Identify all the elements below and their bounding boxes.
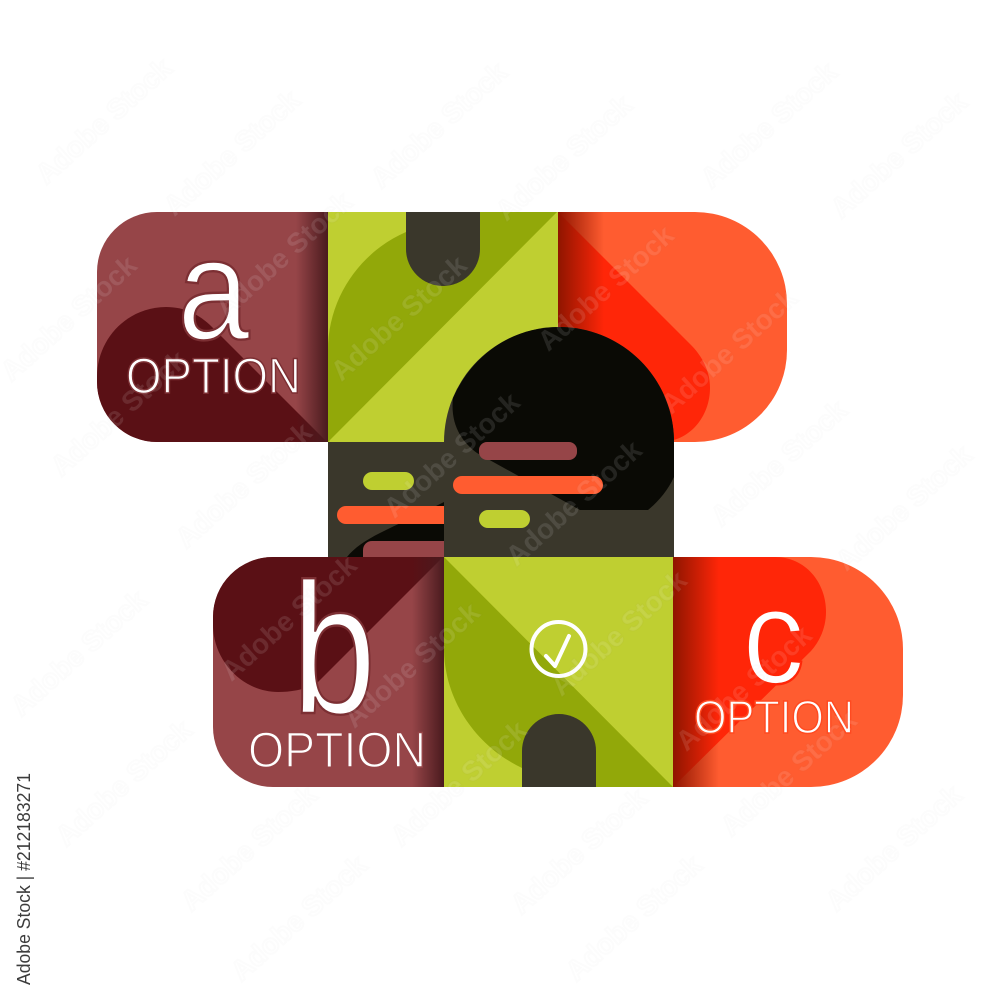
label: option c: OPTION [694,691,854,743]
watermark pattern: Adobe Stock [158,84,306,222]
watermark pattern: Adobe Stock [385,714,533,852]
panel: bottom green square [444,557,673,787]
bar: green [363,472,414,490]
vertical credit text: Adobe Stock | #212183271 [14,773,34,985]
watermark pattern: Adobe Stock [715,704,863,842]
watermark pattern: Adobe Stock [545,564,693,702]
bar: orange [337,506,444,524]
watermark pattern: Adobe Stock [490,89,638,227]
label: option b: OPTION [248,722,426,778]
panel: top red [558,212,787,442]
watermark pattern: Adobe Stock [505,782,653,920]
watermark pattern: Adobe Stock [820,779,968,917]
watermark pattern: Adobe Stock [175,779,323,917]
watermark pattern: Adobe Stock [215,549,363,687]
watermark pattern: Adobe Stock [45,344,193,482]
icon: check in circle [532,622,586,676]
bar: maroon [363,541,444,557]
watermark pattern: Adobe Stock [655,282,803,420]
letter b: b [292,546,376,753]
panel: left dark text block [328,442,444,557]
panel: option b [213,546,444,787]
watermark pattern: Adobe Stock [670,619,818,757]
watermark pattern: Adobe Stock [532,219,680,357]
watermark pattern: Adobe Stock [338,596,486,734]
watermark pattern: Adobe Stock [50,714,198,852]
bar: maroon [479,442,577,460]
panel: option a [97,209,328,442]
bar: orange [453,476,603,494]
watermark pattern: Adobe Stock [378,386,526,524]
label: option a: OPTION [126,348,301,404]
watermark pattern: Adobe Stock [705,394,853,532]
watermark pattern: Adobe Stock [560,849,708,987]
panel: top green square [328,212,558,442]
watermark pattern: Adobe Stock [5,584,153,722]
watermark pattern: Adobe Stock [695,56,843,194]
letter a: a [178,209,250,370]
watermark pattern: Adobe Stock [210,186,358,324]
watermark pattern: Adobe Stock [325,249,473,387]
watermark pattern: Adobe Stock [830,439,978,577]
dark pill bottom [522,714,596,787]
bar: green [479,510,530,528]
watermark pattern: Adobe Stock [365,56,513,194]
watermark pattern: Adobe Stock [825,86,973,224]
watermark pattern: Adobe Stock [30,52,178,190]
watermark pattern: Adobe Stock [225,849,373,987]
letter c: c [742,561,804,712]
panel: central dome [444,327,674,557]
panel: option c [673,557,903,787]
dark pill top [406,212,480,286]
watermark pattern: Adobe Stock [170,416,318,554]
watermark pattern: Adobe Stock [500,434,648,572]
